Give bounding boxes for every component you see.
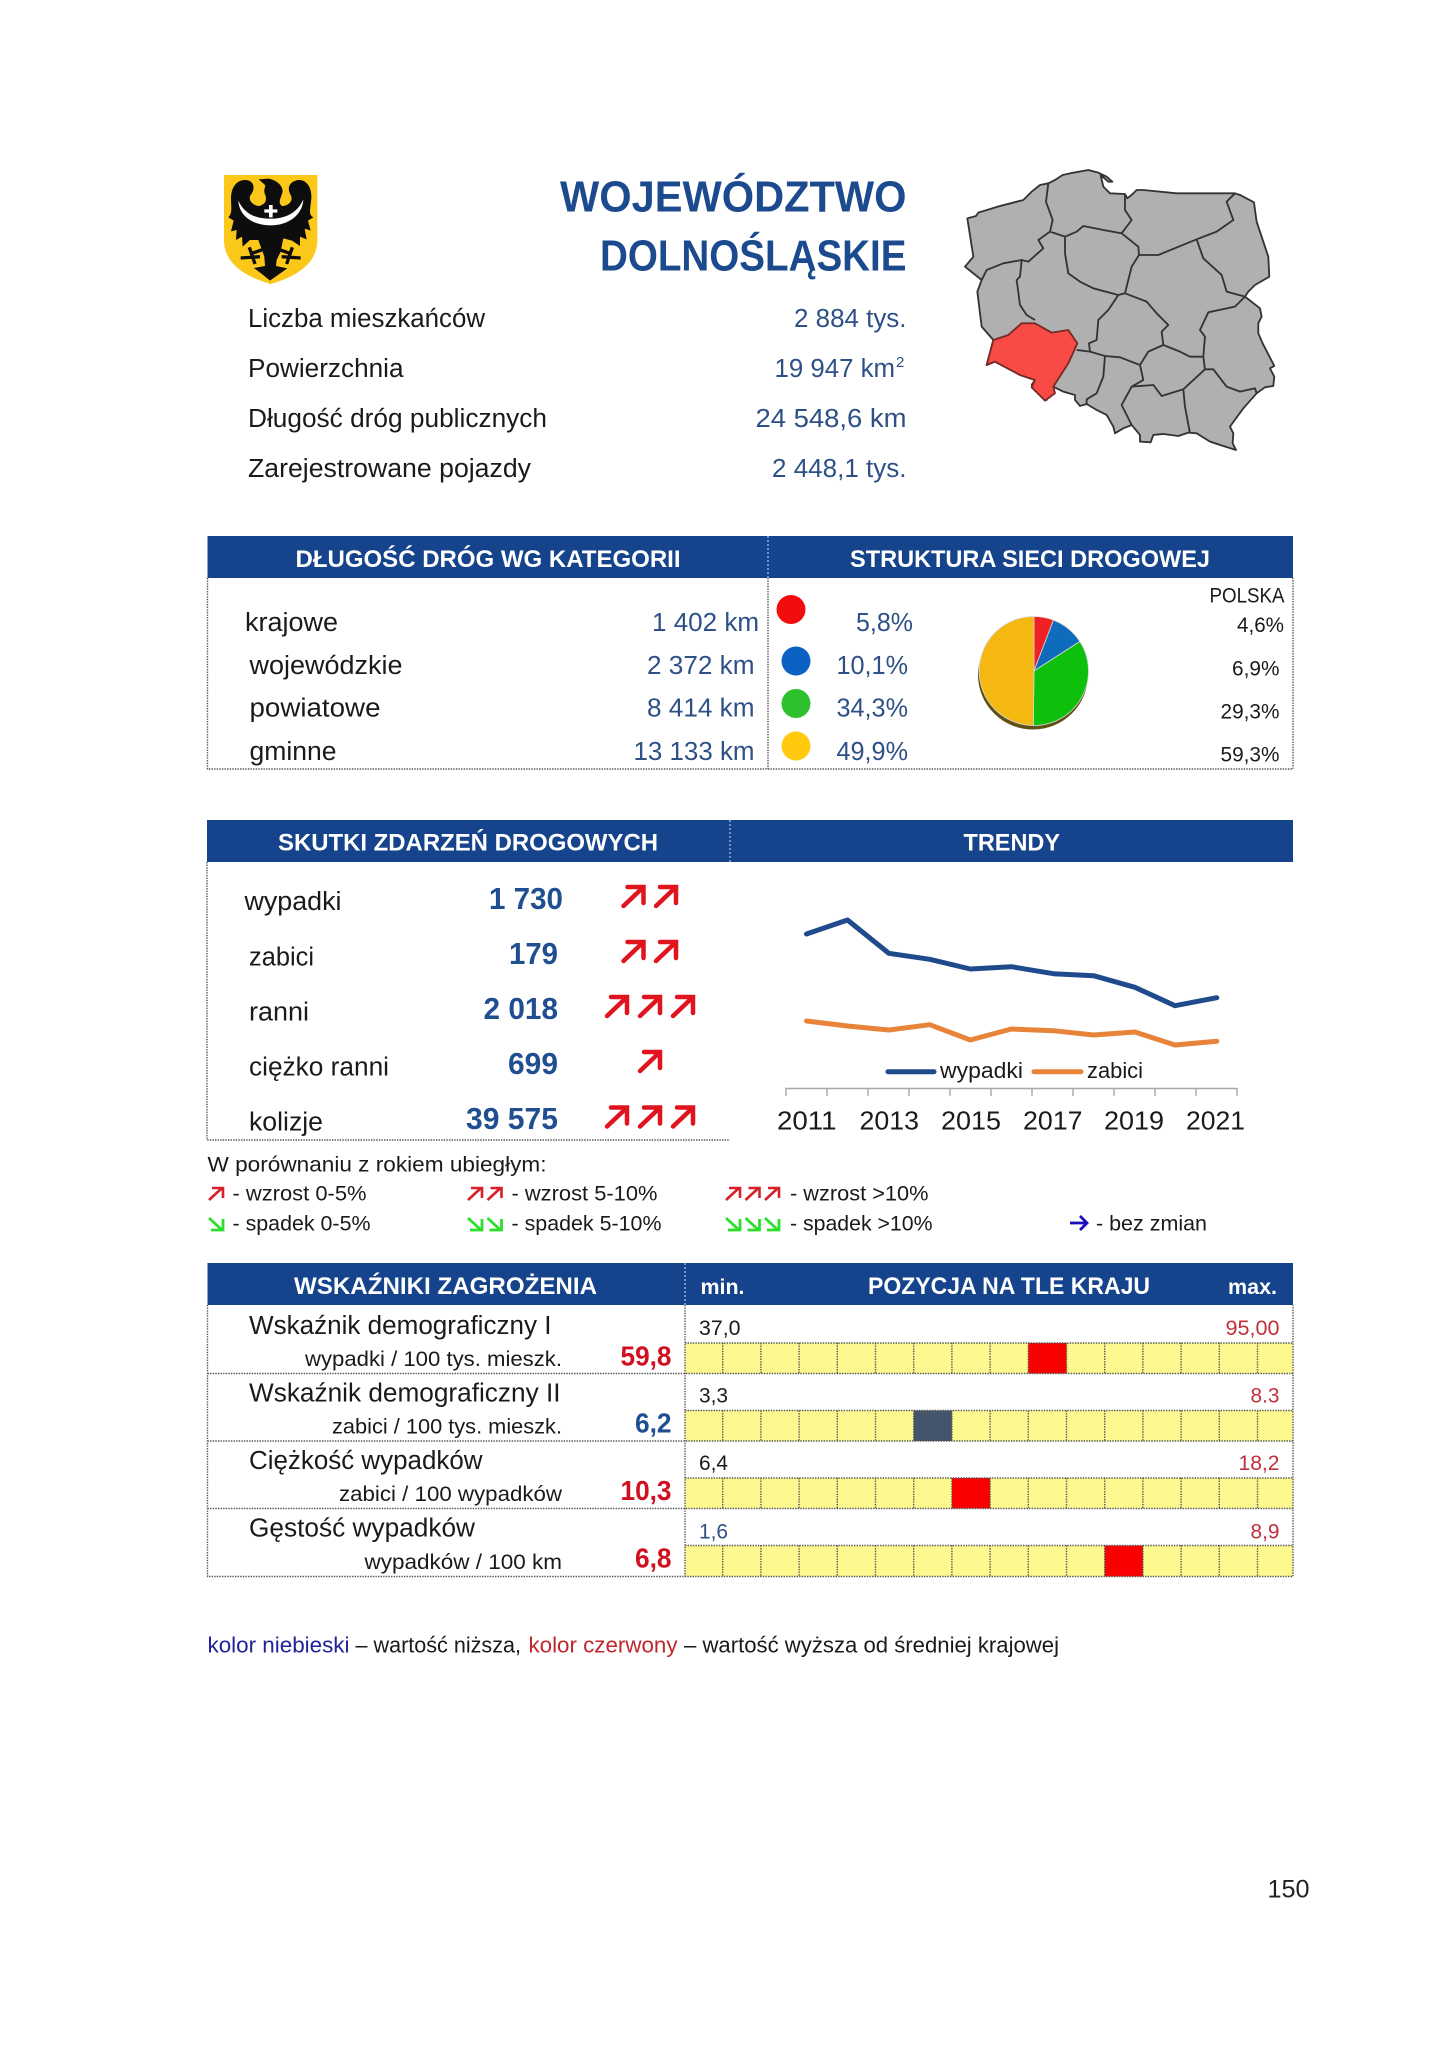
line chart: trends bbox=[777, 920, 1245, 1136]
axis year labels: 2013 bbox=[860, 1108, 919, 1136]
header bar bbox=[208, 536, 1293, 578]
panel: risk indicators bbox=[208, 1263, 1293, 1576]
row: Wskaźnik demograficzny I: 59,8 bbox=[620, 1340, 672, 1372]
statistic: area: Powierzchnia bbox=[248, 355, 404, 383]
label: min: min. bbox=[700, 1276, 744, 1299]
row: Gęstość wypadków: 1,6 bbox=[699, 1520, 728, 1544]
row: krajowe: 1 402 km bbox=[652, 609, 759, 637]
row: gminne: 49,9% bbox=[836, 738, 908, 766]
footnote: colour key: kolor niebieski bbox=[208, 1632, 350, 1658]
row: Wskaźnik demograficzny II: 8.3 bbox=[1250, 1384, 1280, 1408]
axis year labels: 2015 bbox=[941, 1108, 1001, 1136]
row: powiatowe: 34,3% bbox=[836, 694, 908, 722]
legend item: increase 5-10%: - wzrost 5-10% bbox=[512, 1182, 658, 1206]
row: Wskaźnik demograficzny I: Wskaźnik demograficzny I bbox=[249, 1312, 552, 1340]
icon: coat of arms with black eagle bbox=[224, 175, 317, 284]
title: DOLNOŚLĄSKIE bbox=[600, 230, 906, 280]
label: max: max. bbox=[1228, 1276, 1277, 1299]
legend item: decrease over 10% bbox=[726, 1212, 932, 1236]
row: powiatowe: 29,3% bbox=[1220, 700, 1280, 724]
row: kolizje: kolizje bbox=[249, 1108, 323, 1136]
statistic: area: 2 bbox=[896, 354, 904, 371]
heading: national position: POZYCJA NA TLE KRAJU bbox=[868, 1273, 1150, 1300]
legend item: no change: - bez zmian bbox=[1096, 1212, 1207, 1236]
axis year labels: 2011 bbox=[777, 1108, 836, 1136]
row: wypadki: wypadki bbox=[243, 888, 342, 916]
statistic: public roads length: 24 548,6 km bbox=[756, 405, 906, 433]
row: Wskaźnik demograficzny II: zabici / 100 tys. mieszk. bbox=[332, 1416, 562, 1438]
row: krajowe: 4,6% bbox=[1237, 614, 1284, 637]
row: Ciężkość wypadków: 10,3 bbox=[620, 1475, 672, 1506]
row: powiatowe: powiatowe bbox=[250, 694, 380, 722]
axis year labels: 2019 bbox=[1104, 1108, 1164, 1136]
row: Wskaźnik demograficzny I: wypadki / 100 tys. mieszk. bbox=[304, 1348, 562, 1371]
row: Wskaźnik demograficzny II: 6,2 bbox=[635, 1408, 672, 1438]
row: wojewódzkie: 2 372 km bbox=[647, 652, 754, 680]
axis year labels: 2021 bbox=[1186, 1108, 1245, 1136]
chart legend: zabici bbox=[1087, 1058, 1143, 1083]
position grid: yellow cells and markers bbox=[685, 1343, 1293, 1576]
row: zabici bbox=[249, 936, 676, 972]
row: Wskaźnik demograficzny I: 37,0 bbox=[699, 1317, 740, 1340]
legend item: increase 0-5%: - wzrost 0-5% bbox=[232, 1182, 366, 1206]
row: Ciężkość wypadków bbox=[249, 1447, 1280, 1506]
row: Wskaźnik demograficzny I bbox=[249, 1312, 1280, 1372]
row: Ciężkość wypadków: zabici / 100 wypadków bbox=[339, 1483, 563, 1506]
row: wojewódzkie: 6,9% bbox=[1232, 658, 1280, 680]
row: Ciężkość wypadków: 6,4 bbox=[699, 1452, 728, 1475]
row: gminne: 59,3% bbox=[1220, 744, 1280, 766]
row: ciężko ranni: 699 bbox=[508, 1046, 558, 1081]
header bar bbox=[207, 820, 1293, 862]
icon: map of Poland with highlighted region bbox=[965, 170, 1274, 450]
statistic: area: 19 947 km bbox=[774, 355, 895, 383]
statistic: public roads length bbox=[248, 405, 906, 433]
heading: indicators: WSKAŹNIKI ZAGROŻENIA bbox=[294, 1272, 597, 1300]
legend item: decrease 0-5%: - spadek 0-5% bbox=[232, 1212, 370, 1236]
chart legend: wypadki bbox=[939, 1058, 1023, 1083]
row: Gęstość wypadków: Gęstość wypadków bbox=[249, 1514, 476, 1542]
axis year labels bbox=[777, 1108, 1245, 1136]
row: Wskaźnik demograficzny I: 95,00 bbox=[1226, 1317, 1280, 1340]
page number: 150 bbox=[1268, 1876, 1310, 1904]
legend item: decrease 5-10%: - spadek 5-10% bbox=[512, 1212, 662, 1236]
footnote: colour key: kolor czerwony bbox=[528, 1632, 678, 1658]
row: Gęstość wypadków: 6,8 bbox=[635, 1542, 672, 1574]
title: WOJEWÓDZTWO bbox=[560, 172, 906, 222]
row: ranni: ranni bbox=[249, 998, 309, 1026]
row: ciężko ranni bbox=[249, 1046, 660, 1082]
statistic: registered vehicles: Zarejestrowane pojazdy bbox=[248, 455, 531, 483]
row: kolizje bbox=[249, 1101, 693, 1136]
row: Gęstość wypadków: 8,9 bbox=[1250, 1520, 1280, 1544]
row: Ciężkość wypadków: 18,2 bbox=[1238, 1452, 1280, 1475]
panel: basic statistics bbox=[248, 305, 906, 483]
panel: road accident effects and trends bbox=[207, 820, 1293, 1140]
row: powiatowe: 8 414 km bbox=[647, 694, 754, 722]
label: POLSKA: POLSKA bbox=[1210, 584, 1284, 608]
row: Ciężkość wypadków: Ciężkość wypadków bbox=[249, 1447, 483, 1475]
row: powiatowe bbox=[250, 689, 1280, 724]
statistic: population: 2 884 tys. bbox=[794, 305, 906, 333]
statistic: public roads length: Długość dróg publicznych bbox=[248, 405, 547, 433]
row: gminne: 13 133 km bbox=[634, 738, 754, 766]
row: wypadki bbox=[243, 881, 676, 916]
footnote: colour key: – wartość niższa, bbox=[356, 1632, 521, 1658]
legend heading: W porównaniu z rokiem ubiegłym: bbox=[208, 1154, 546, 1176]
row: gminne bbox=[250, 732, 1280, 766]
statistic: population bbox=[248, 305, 906, 333]
legend item: decrease over 10%: - spadek >10% bbox=[790, 1212, 932, 1236]
row: gminne: gminne bbox=[250, 738, 336, 766]
row: zabici: zabici bbox=[249, 944, 314, 972]
row: wojewódzkie bbox=[248, 646, 1279, 680]
pie chart bbox=[978, 616, 1088, 730]
footnote: colour key: – wartość wyższa od średniej krajowej bbox=[684, 1632, 1059, 1658]
statistic: registered vehicles bbox=[248, 455, 906, 483]
panel: road length and network structure bbox=[208, 536, 1293, 769]
row: Wskaźnik demograficzny II: Wskaźnik demograficzny II bbox=[249, 1380, 560, 1408]
row: krajowe bbox=[245, 595, 1284, 637]
footnote: colour key bbox=[208, 1632, 1059, 1658]
row: krajowe: krajowe bbox=[245, 609, 338, 637]
row: Gęstość wypadków bbox=[249, 1514, 1280, 1574]
header bar bbox=[208, 1263, 1293, 1305]
row: kolizje: 39 575 bbox=[466, 1101, 558, 1136]
chart legend bbox=[888, 1058, 1143, 1083]
legend item: increase over 10% bbox=[726, 1182, 928, 1206]
row: ciężko ranni: ciężko ranni bbox=[249, 1054, 389, 1082]
statistic: population: Liczba mieszkańców bbox=[248, 305, 486, 333]
statistic: registered vehicles: 2 448,1 tys. bbox=[772, 455, 906, 483]
row: wojewódzkie: wojewódzkie bbox=[248, 652, 402, 680]
heading: trends: TRENDY bbox=[964, 830, 1060, 856]
statistic: area bbox=[248, 354, 904, 383]
legend: year-on-year arrows bbox=[208, 1154, 1207, 1236]
row: wojewódzkie: 10,1% bbox=[836, 652, 908, 680]
row: Gęstość wypadków: wypadków / 100 km bbox=[363, 1551, 562, 1574]
row: ranni bbox=[249, 991, 693, 1026]
row: wypadki: 1 730 bbox=[489, 881, 563, 916]
heading: road length: DŁUGOŚĆ DRÓG WG KATEGORII bbox=[296, 545, 680, 573]
row: Wskaźnik demograficzny II: 3,3 bbox=[699, 1384, 728, 1408]
row: Wskaźnik demograficzny II bbox=[249, 1380, 1280, 1438]
axis year labels: 2017 bbox=[1023, 1108, 1082, 1136]
title bbox=[560, 172, 906, 280]
row: zabici: 179 bbox=[509, 936, 558, 971]
legend item: increase over 10%: - wzrost >10% bbox=[790, 1182, 928, 1206]
row: krajowe: 5,8% bbox=[856, 609, 913, 637]
heading: network structure: STRUKTURA SIECI DROGOWEJ bbox=[850, 546, 1210, 573]
row: ranni: 2 018 bbox=[484, 991, 558, 1026]
heading: effects: SKUTKI ZDARZEŃ DROGOWYCH bbox=[278, 828, 658, 856]
